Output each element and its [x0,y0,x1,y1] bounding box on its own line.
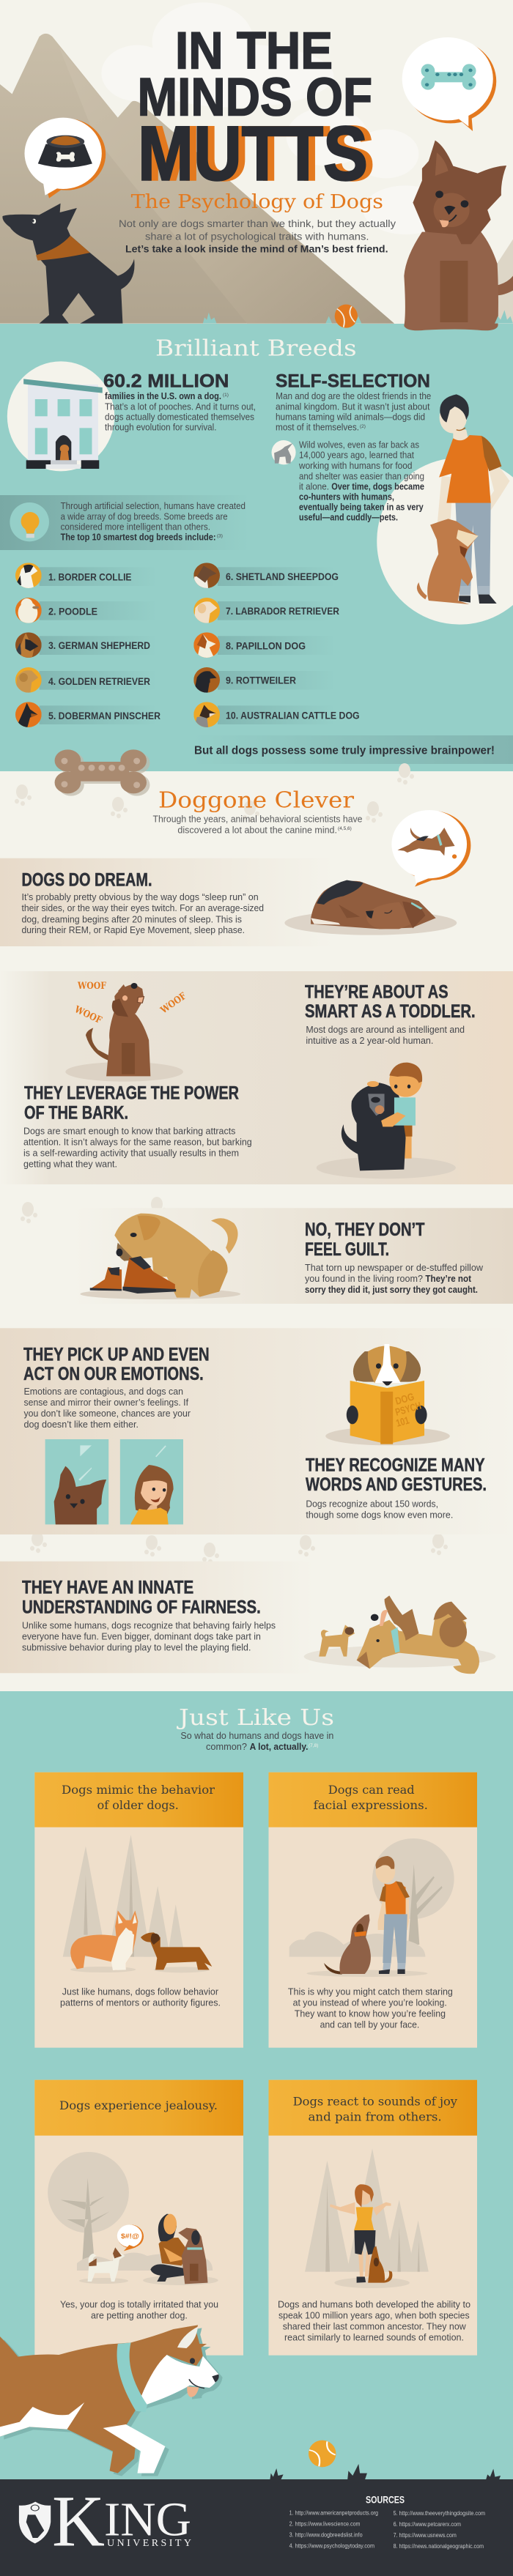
text block: wild wolves [298,440,424,523]
breed names [48,571,360,721]
text: mimic: patterns of mentors or authority figures. [60,1997,221,2008]
breed names: 2. POODLE [48,606,97,617]
bubble text: swearing: $#!@ [121,2232,139,2240]
label: book title: 101 [394,1414,410,1429]
illustration: barking dog [65,983,183,1082]
text block: words and gestures: Dogs recognize about 150 words, [306,1499,438,1509]
breed names: 3. GERMAN SHEPHERD [48,640,150,651]
sources: 5. http://www.theeverythingdogsite.com [394,2510,485,2517]
subtitle: The Psychology of Dogs: The Psychology of Dogs [131,191,383,213]
text block: power of the bark: getting what they want. [23,1159,117,1170]
heading: dogs do dream: DOGS DO DREAM. [22,869,152,890]
panel: dogs do dream [0,858,333,946]
text block: no guilt: They’re not [425,1274,472,1284]
text block: wild wolves: working with humans for food [298,461,413,471]
label: woof: WOOF [77,981,107,992]
panel: no guilt [73,1208,513,1304]
panel: mimic older dogs [34,1773,243,2048]
card title: sounds: and pain from others. [308,2110,442,2124]
sources: 4. https://www.psychologytoday.com [289,2543,374,2550]
sources [289,2494,485,2550]
label: book title [394,1390,422,1429]
header illustration: sky and mountains [0,2,513,324]
text block: wild wolves: 14,000 years ago, learned that [299,450,414,461]
heading: Just Like Us: Just Like Us [177,1705,334,1731]
text block: power of the bark: OF THE BARK. [24,1102,128,1123]
logo: King University: ING [104,2493,191,2547]
callout: artificial selection: a wide array of dog breeds. Some breeds are [61,511,228,521]
text: mimic: Just like humans, dogs follow behavior [62,1986,218,1997]
stat: 60.2 million families: dogs actually domesticated themselves [105,412,254,422]
intro text: just like us [180,1731,333,1752]
icon: howling wolf [272,440,296,464]
sources: 1. http://www.americanpetproducts.org [289,2510,378,2517]
callout: artificial selection: considered more intelligent than others. [61,521,210,532]
text block: power of the bark: attention. It isn’t always for the same reason, but barking [23,1137,252,1147]
text block: power of the bark [23,1083,252,1170]
text block: power of the bark: THEY LEVERAGE THE POWER [24,1083,239,1104]
intro text: doggone clever: discovered a lot about the canine mind. [177,824,337,835]
title: In the Minds of Mutts [138,22,374,197]
section background: Just Like Us [0,1691,513,2479]
logo: King University: UNIVERSITY [107,2538,191,2549]
sources: 8. https://news.nationalgeographic.com [394,2543,484,2550]
intro text: doggone clever: Through the years, animal behavioral scientists have [152,814,362,825]
intro text: just like us: So what do humans and dogs have in [180,1731,333,1741]
body text: dogs do dream: dog, dreaming begins after 20 minutes of sleep. This is [22,914,242,924]
stat: 60.2 million families: through evolution for survival. [105,423,217,433]
stat: 60.2 million families: 60.2 MILLION [103,371,229,391]
text block: power of the bark: is a self-rewarding activity that usually results in them [23,1148,239,1159]
text block: words and gestures [306,1455,487,1520]
intro text: just like us: A lot, actually. [250,1742,308,1752]
text: facial expressions: This is why you might catch them staring [288,1986,453,1997]
card title: sounds: Dogs react to sounds of joy [293,2094,457,2108]
callout: impressive brainpower: But all dogs possess some truly impressive brainpower! [194,744,495,757]
intro text: doggone clever [152,814,362,835]
title: In the Minds of Mutts: MUTTS [138,111,368,197]
illustration: dog in window [45,1439,108,1526]
text: facial expressions: They want to know how you’re feeling [295,2008,446,2019]
text block: no guilt: NO, THEY DON’T [305,1220,425,1240]
stat: 60.2 million families: (1) [223,393,229,398]
stat: 60.2 million families [103,371,256,433]
text block: self-selection: humans taming wild animals—dogs did [276,412,425,423]
callout: artificial selection [0,495,249,550]
grass tufts [270,2464,501,2480]
logo shield [19,2502,51,2544]
text block: words and gestures: though some dogs know even more. [306,1510,453,1520]
sources: 3. http://www.dogbreedslist.info [289,2532,363,2539]
body text: dogs do dream: during their REM, or Rapid Eye Movement, sleep phase. [22,925,245,935]
text block: self-selection: SELF-SELECTION [276,371,430,391]
text: facial expressions: at you instead of where you’re looking. [293,1997,447,2008]
text: sounds [278,2299,470,2343]
illustration: woman and dog in trees [305,2148,429,2288]
text block: fairness: everyone have fun. Even bigger, dominant dogs take part in [22,1631,261,1641]
text: jealousy: Yes, your dog is totally irritated that you [60,2299,218,2309]
text block: act on our emotions: sense and mirror their owner’s feelings. If [23,1398,189,1408]
illustration: woman in window [120,1439,183,1526]
label: book title: DOG [394,1390,416,1407]
text block: act on our emotions: you don’t like someone, chances are your [23,1408,191,1419]
callout: artificial selection: The top 10 smartest dog breeds include: [61,532,216,542]
breed names: 5. DOBERMAN PINSCHER [48,710,160,721]
text block: no guilt: sorry they did it, just sorry they got caught. [305,1285,478,1295]
text block: act on our emotions: dog doesn’t like them either. [23,1419,139,1430]
icon: orange ball and grass tufts [203,305,513,328]
text block: fairness: THEY HAVE AN INNATE [22,1578,193,1598]
intro text: share a lot of psychological traits with humans. [145,231,369,242]
teal section background: Brilliant Breeds [0,324,513,771]
text block: smart as a toddler [305,981,476,1046]
text: facial expressions: and can tell by your face. [320,2019,419,2030]
card title: mimic: of older dogs. [97,1798,179,1812]
text block: act on our emotions: ACT ON OUR EMOTIONS. [23,1364,204,1384]
text block: fairness: UNDERSTANDING OF FAIRNESS. [22,1597,261,1618]
panel: jealousy [34,2080,243,2356]
text block: wild wolves: Over time, dogs became [331,481,424,491]
panel: emotions and words [0,1328,513,1534]
text block: act on our emotions [23,1345,210,1430]
sources: 2. https://www.livescience.com [289,2521,361,2528]
text block: no guilt: you found in the living room? [305,1274,423,1284]
label: woof: WOOF [73,1004,104,1026]
illustration: dog chewing boots [80,1214,240,1299]
illustration: book-reading dog [325,1344,450,1445]
text block: wild wolves: co-hunters with humans, [299,491,394,502]
card title: facial expressions [314,1783,428,1812]
panel: fairness [0,1562,314,1673]
illustration: brown dog [404,141,513,330]
text: facial expressions [288,1986,453,2030]
breed names: 1. BORDER COLLIE [48,572,132,583]
illustration: man and dog staring [289,1838,454,1977]
sources: 6. https://www.petcarerx.com [394,2521,461,2528]
card title: mimic [62,1783,215,1812]
intro text: just like us: (7,8) [309,1743,318,1748]
illustration: running dog [0,2325,223,2476]
breed names: 8. PAPILLON DOG [226,641,306,652]
panel: bark and toddler [0,971,513,1184]
heading: Brilliant Breeds: Brilliant Breeds [155,336,357,362]
card title: mimic: Dogs mimic the behavior [62,1783,215,1797]
card title: facial expressions: Dogs can read [328,1783,415,1797]
intro text: Let’s take a look inside the mind of Man’s best friend. [125,244,388,255]
text: sounds: speak 100 million years ago, when both species [278,2311,470,2321]
stat: 60.2 million families: That’s a lot of pooches. And it turns out, [105,401,256,412]
intro text: doggone clever: (4,5,6) [338,826,352,831]
intro text [119,218,396,255]
callout: impressive brainpower [193,735,513,764]
body text: dogs do dream [22,892,264,935]
title: In the Minds of Mutts: MINDS OF [138,67,372,127]
sources: 7. https://www.usnews.com [394,2532,457,2539]
text: mimic [60,1986,221,2008]
breed row bars [40,567,336,724]
footer background [0,2479,513,2576]
logo: King University [19,2481,191,2562]
breed names: 6. SHETLAND SHEEPDOG [226,571,339,582]
label: woof: WOOF [158,990,189,1017]
intro text: Not only are dogs smarter than we think, but they actually [119,218,396,229]
illustration: woman, dog and jealous chihuahua [48,2152,218,2285]
text: jealousy: are petting another dog. [91,2311,188,2321]
text block: wild wolves: eventually being taken in as very [299,502,424,513]
text: sounds: Dogs and humans both developed the ability to [278,2299,470,2309]
speech bubble: bone [402,37,496,131]
icon: tennis ball [309,2440,336,2467]
illustration: boy hugging black dog [317,1063,456,1178]
list: top 10 smartest dog breeds [15,563,360,730]
logo: King University: K [52,2481,105,2562]
paw print pattern [15,763,448,1564]
intro text: just like us: common? [206,1742,247,1752]
speech bubble: dream of running [391,810,470,887]
illustration: man petting dog [377,394,513,625]
label: book title: PSYCH [394,1400,422,1418]
text block: smart as a toddler: SMART AS A TODDLER. [305,1001,476,1022]
text block: wild wolves: useful—and cuddly—pets. [299,513,398,523]
text block: fairness: Unlike some humans, dogs recognize that behaving fairly helps [22,1620,276,1630]
illustration: corgi and dachshund in trees [63,1835,212,1972]
callout: artificial selection: Through artificial selection, humans have created [61,501,246,511]
card title: jealousy: Dogs experience jealousy. [59,2098,218,2112]
text block: power of the bark: Dogs are smart enough to know that barking attracts [23,1126,235,1137]
text block: wild wolves: Wild wolves, even as far back as [299,440,419,450]
sources: SOURCES [366,2494,405,2506]
text block: wild wolves: it alone. [299,481,329,491]
text: jealousy [60,2299,218,2321]
text block: no guilt: FEEL GUILT. [305,1239,389,1260]
breed names: 9. ROTTWEILER [226,675,296,686]
breed portraits [15,563,220,730]
body text: dogs do dream: their sides, or the way their eyes twitch. For an average-sized [22,903,264,913]
heading: Doggone Clever: Doggone Clever [158,787,355,813]
text block: self-selection: (2) [360,424,366,429]
callout: artificial selection: (3) [217,533,223,539]
text block: no guilt: That torn up newspaper or de-stuffed pillow [305,1263,484,1273]
text block: no guilt [305,1220,484,1295]
text block: wild wolves: and shelter was easier than going [299,471,424,481]
text block: smart as a toddler: Most dogs are around as intelligent and [306,1025,465,1035]
text: sounds: react similarly to learned sounds of emotion. [284,2333,464,2343]
illustration: playing dogs [304,1595,495,1674]
text block: fairness [22,1578,276,1652]
text block: self-selection: animal kingdom. But it wasn’t just about [276,401,430,412]
title: In the Minds of Mutts: IN THE [175,22,333,80]
speech bubble: dog bowl [24,118,106,198]
stat: 60.2 million families: families in the U.S. own a dog. [105,391,221,401]
text block: self-selection: Man and dog are the oldest friends in the [276,391,431,401]
card title: facial expressions: facial expressions. [314,1798,428,1812]
panel: read facial expressions [268,1773,477,2048]
text block: act on our emotions: THEY PICK UP AND EVEN [23,1345,210,1365]
illustration: house with dog [7,361,114,471]
title: In the Minds of Mutts: MUTTS [144,111,374,197]
text block: self-selection: most of it themselves. [276,423,359,433]
text block: act on our emotions: Emotions are contagious, and dogs can [23,1387,183,1397]
text block: smart as a toddler: THEY’RE ABOUT AS [305,981,449,1002]
breed names: 7. LABRADOR RETRIEVER [226,606,339,617]
icon: lightbulb [10,502,49,541]
text: sounds: shared their last common ancestor. They now [283,2322,467,2332]
breed names: 4. GOLDEN RETRIEVER [48,676,150,687]
illustration: black dog [2,204,135,324]
body text: dogs do dream: It’s probably pretty obvious by the way dogs “sleep run” on [22,892,259,902]
card title: sounds [293,2094,457,2124]
text block: fairness: submissive behavior during play to level the playing field. [22,1642,251,1652]
breed names: 10. AUSTRALIAN CATTLE DOG [226,710,360,721]
illustration: sleeping dog [284,880,457,935]
text block: self-selection [276,371,431,433]
illustration: bone [55,749,150,796]
text block: smart as a toddler: intuitive as a 2 year-old human. [306,1036,433,1046]
panel: sounds of joy and pain [268,2080,477,2356]
